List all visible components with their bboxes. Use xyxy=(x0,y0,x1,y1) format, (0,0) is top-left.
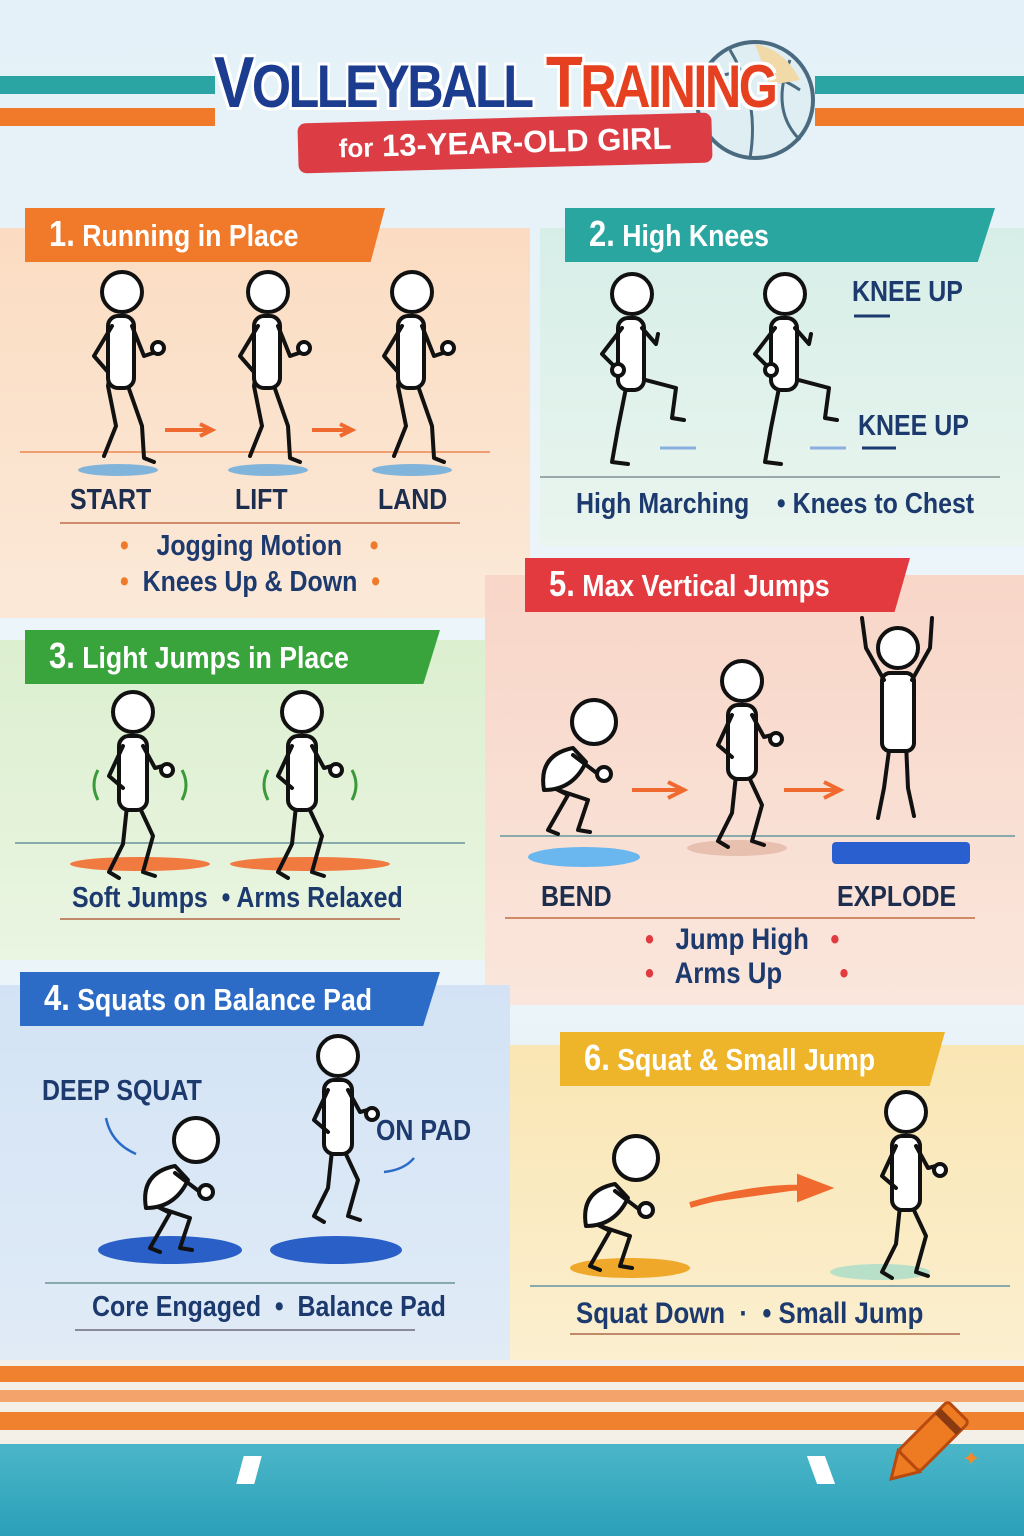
bullets: • Knees Up & Down • xyxy=(120,566,380,598)
labels: START xyxy=(70,484,151,516)
figures: panel 1 xyxy=(20,272,490,476)
bottom track xyxy=(0,1360,1024,1536)
heading 3 xyxy=(25,630,440,684)
labels: Squat Down · • Small Jump xyxy=(576,1297,923,1330)
panel: 1 running in place: LAND xyxy=(378,484,447,516)
panel: 5 max vertical jumps: • Jump High • xyxy=(645,923,839,956)
panel: 3 light jumps xyxy=(0,640,495,960)
subtitle ribbon xyxy=(297,113,713,173)
panel: 1 running in place xyxy=(0,228,530,618)
heading 4: 4. Squats on Balance Pad xyxy=(44,977,372,1018)
panel: 5 max vertical jumps xyxy=(485,575,1024,1005)
heading 1: 1. Running in Place xyxy=(49,213,299,254)
title: VOLLEYBALL TRAINING xyxy=(214,43,775,123)
bullets xyxy=(120,530,380,598)
heading 3: 3. Light Jumps in Place xyxy=(49,635,349,676)
heading 2 xyxy=(565,208,995,262)
icon: volleyball xyxy=(696,40,815,160)
panel: 2 high knees: KNEE UP xyxy=(858,410,969,442)
heading 2: 2. High Knees xyxy=(589,213,769,254)
panel: 2 high knees: High Marching • Knees to Chest xyxy=(576,488,974,520)
labels: BEND xyxy=(541,881,612,913)
heading 4 xyxy=(20,972,440,1026)
figures: panel 3 xyxy=(70,692,390,878)
icon: crayon: ✦ xyxy=(962,1447,980,1472)
subtitle ribbon: for 13-YEAR-OLD GIRL xyxy=(338,121,672,163)
panel: 1 running in place: LIFT xyxy=(235,484,288,516)
heading 5: 5. Max Vertical Jumps xyxy=(549,563,830,604)
labels: DEEP SQUAT xyxy=(42,1075,202,1107)
figures: panel 4 xyxy=(98,1036,414,1264)
panel: 2 high knees xyxy=(540,228,1024,546)
bullets: • Jogging Motion • xyxy=(120,530,379,562)
figures: panel 5 xyxy=(528,618,970,867)
heading 1 xyxy=(25,208,385,262)
figures: panel 6 xyxy=(570,1092,946,1280)
panel: 5 max vertical jumps: • Arms Up • xyxy=(645,957,849,990)
labels: KNEE UP xyxy=(852,276,963,308)
heading 6 xyxy=(560,1032,945,1086)
panel: 4 squats on balance pad: ON PAD xyxy=(376,1115,471,1147)
heading 6: 6. Squat & Small Jump xyxy=(584,1037,875,1078)
top stripes xyxy=(0,76,1024,126)
figures: panel 2 xyxy=(602,274,896,464)
panel: 4 squats on balance pad: Core Engaged • Balance Pad xyxy=(92,1291,446,1323)
heading 5 xyxy=(525,558,910,612)
panel: 6 squat & small jump xyxy=(510,1045,1024,1360)
icon: crayon xyxy=(889,1401,980,1481)
panel: 4 squats on balance pad xyxy=(0,985,510,1360)
labels: Soft Jumps • Arms Relaxed xyxy=(72,882,403,914)
panel: 5 max vertical jumps: EXPLODE xyxy=(837,881,956,913)
